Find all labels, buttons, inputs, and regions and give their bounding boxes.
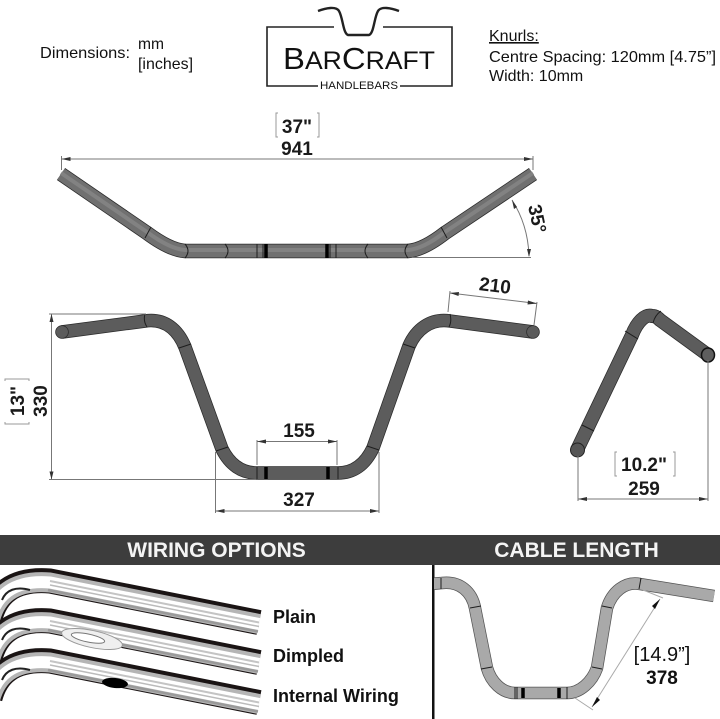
dimension: rise 330 / 13 inches xyxy=(5,314,256,480)
dimensions legend: [inches] xyxy=(138,56,193,73)
knurls specification xyxy=(489,28,716,85)
logo: BarCraft Handlebars: HANDLEBARS xyxy=(320,80,398,92)
dimension: 259 depth / 10.2 inches xyxy=(578,360,708,501)
chrome bar: internal wiring xyxy=(0,661,259,712)
section header: wiring options and cable length xyxy=(0,535,720,565)
dimension: cable length 378 / 14.9 inches xyxy=(575,590,690,710)
dimension: 210 grip length xyxy=(448,274,537,325)
chrome bar: dimpled xyxy=(0,621,259,672)
dimension: 210 grip length: 210 xyxy=(478,274,512,299)
dimension: rise 330 / 13 inches: 13" xyxy=(8,386,29,416)
section header: wiring options and cable length: CABLE LENGTH xyxy=(494,539,659,562)
chrome bar: plain xyxy=(0,581,259,632)
dimension: 155 centre width xyxy=(257,421,337,465)
dimension: cable length 378 / 14.9 inches: [14.9”] xyxy=(634,644,690,666)
dimensions legend xyxy=(40,36,193,73)
dimension: 259 depth / 10.2 inches: 10.2" xyxy=(621,455,667,476)
logo: BarCraft Handlebars: BARCRAFT xyxy=(283,41,435,76)
section header: wiring options and cable length: WIRING OPTIONS xyxy=(127,539,306,562)
panel: wiring options chrome bars xyxy=(0,581,259,712)
dimension: angle 35 degrees xyxy=(412,200,550,258)
knurls specification: Knurls: xyxy=(489,28,539,45)
dimension: overall width 941 / 37 inches: 941 xyxy=(281,139,313,160)
top view handlebar xyxy=(61,173,533,258)
dimension: overall width 941 / 37 inches: 37" xyxy=(282,117,312,138)
dimension: 327 base width xyxy=(216,452,379,513)
dimension: angle 35 degrees: 35° xyxy=(523,203,550,235)
panel divider xyxy=(432,565,434,719)
dimension: cable length 378 / 14.9 inches: 378 xyxy=(646,668,678,689)
side view handlebar xyxy=(570,311,714,457)
dimensions legend: Dimensions: xyxy=(40,45,130,62)
dimension: 259 depth / 10.2 inches: 259 xyxy=(628,479,660,500)
dimension: rise 330 / 13 inches: 330 xyxy=(31,385,52,417)
knurls specification: Centre Spacing: 120mm [4.75”] xyxy=(489,49,716,66)
dimension: 155 centre width: 155 xyxy=(283,421,315,442)
front view handlebar xyxy=(62,314,533,479)
wiring option labels xyxy=(273,607,399,706)
dimension: 327 base width: 327 xyxy=(283,490,315,511)
wiring option labels: Dimpled xyxy=(273,646,344,666)
knurls specification: Width: 10mm xyxy=(489,68,583,85)
logo: BarCraft Handlebars xyxy=(267,8,452,92)
dimension: overall width 941 / 37 inches xyxy=(62,113,533,170)
wiring option labels: Plain xyxy=(273,607,316,627)
panel: cable length handlebar xyxy=(430,578,714,699)
wiring option labels: Internal Wiring xyxy=(273,686,399,706)
dimensions legend: mm xyxy=(138,36,164,53)
